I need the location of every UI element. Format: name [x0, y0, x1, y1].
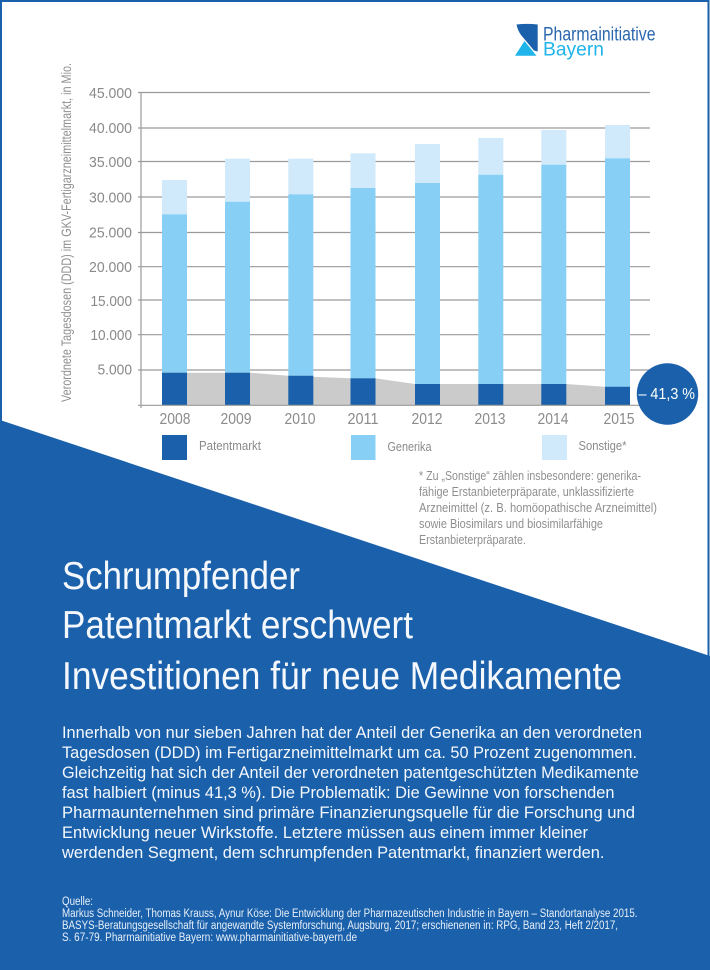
- title: Schrumpfender: [62, 555, 300, 598]
- x axis labels: 2014: [538, 411, 569, 428]
- legend item: Sonstige: [542, 435, 627, 460]
- body text: Gleichzeitig hat sich der Anteil der verordneten patentgeschützten Medikamente: [62, 764, 639, 782]
- body text: fast halbiert (minus 41,3 %). Die Problematik: Die Gewinne von forschenden: [62, 784, 614, 802]
- body text: Innerhalb von nur sieben Jahren hat der Anteil der Generika an den verordneten: [62, 724, 642, 742]
- x axis labels: 2015: [604, 411, 634, 428]
- x axis labels: 2008: [160, 411, 190, 428]
- body text: Tagesdosen (DDD) im Fertigarzneimittelmarkt um ca. 50 Prozent zugenommen.: [62, 744, 637, 762]
- x axis labels: 2009: [220, 411, 252, 428]
- body text: [61, 724, 642, 862]
- y axis labels: 15.000: [90, 293, 132, 310]
- bar 2011: [350, 153, 376, 406]
- body text: Pharmaunternehmen sind primäre Finanzierungsquelle für die Forschung und: [62, 804, 635, 822]
- legend item: Patentmarkt: Patentmarkt: [199, 439, 261, 453]
- title: Investitionen für neue Medikamente: [62, 655, 622, 698]
- source: [62, 896, 638, 944]
- logo text: [543, 24, 656, 60]
- patent market trend area: [162, 373, 630, 405]
- y axis labels: [89, 85, 132, 378]
- y axis labels: 45.000: [89, 85, 132, 102]
- body text: Entwicklung neuer Wirkstoffe. Letztere müssen aus einem immer kleiner: [62, 824, 588, 842]
- source: Quelle:: [62, 896, 93, 908]
- callout: minus 41,3 percent: – 41,3 %: [638, 386, 695, 403]
- y axis labels: 25.000: [89, 224, 132, 242]
- x axis labels: 2012: [412, 411, 442, 428]
- title: [62, 555, 622, 698]
- footnote: [419, 469, 657, 547]
- legend item: Patentmarkt: [162, 435, 261, 460]
- gridlines: [138, 92, 650, 370]
- bar 2015: [605, 125, 630, 406]
- logo: [515, 24, 656, 60]
- x axis labels: 2013: [474, 411, 506, 428]
- footnote: sowie Biosimilars und biosimilarfähige: [419, 517, 603, 531]
- body text: werdenden Segment, dem schrumpfenden Patentmarkt, finanziert werden.: [61, 844, 604, 862]
- stacked bar chart: [89, 85, 650, 428]
- y axis labels: 10.000: [90, 327, 132, 344]
- y axis labels: 30.000: [89, 190, 132, 206]
- logo text: Pharmainitiative: [543, 24, 656, 46]
- callout: minus 41,3 percent: [637, 363, 698, 425]
- x axis labels: 2011: [348, 411, 378, 428]
- legend item: Generika: Generika: [388, 440, 432, 454]
- footnote: fähige Erstanbieterpräparate, unklassifizierte: [419, 485, 634, 499]
- bar 2014: [541, 130, 566, 406]
- footnote: * Zu „Sonstige“ zählen insbesondere: generika-: [419, 469, 641, 483]
- y axis labels: 20.000: [89, 259, 132, 276]
- legend: [162, 435, 627, 460]
- y axis labels: 35.000: [89, 154, 132, 171]
- legend item: Sonstige: Sonstige*: [578, 439, 627, 453]
- y axis labels: 5.000: [98, 362, 132, 378]
- bar 2008: [162, 180, 187, 406]
- bar 2013: [478, 138, 503, 406]
- bar 2009: [225, 159, 250, 406]
- legend item: Generika: [351, 435, 432, 460]
- logo text: Bayern: [543, 40, 604, 60]
- blue diagonal panel: [0, 420, 710, 970]
- source: S. 67-79. Pharmainitiative Bayern: www.pharmainitiative-bayern.de: [62, 932, 357, 944]
- title: Patentmarkt erschwert: [62, 604, 413, 647]
- source: BASYS-Beratungsgesellschaft für angewandte Systemforschung, Augsburg, 2017; erschienenen in: RPG, Band 23, Heft 2/2017,: [62, 920, 618, 932]
- icon: logo mark: [515, 24, 538, 56]
- bar 2012: [415, 144, 440, 406]
- bar 2010: [288, 159, 313, 406]
- y axis labels: 40.000: [89, 120, 132, 137]
- x axis labels: [160, 411, 634, 428]
- footnote: Arzneimittel (z. B. homöopathische Arzneimittel): [419, 501, 657, 515]
- x axis labels: 2010: [284, 411, 316, 428]
- footnote: Erstanbieterpräparate.: [419, 533, 526, 547]
